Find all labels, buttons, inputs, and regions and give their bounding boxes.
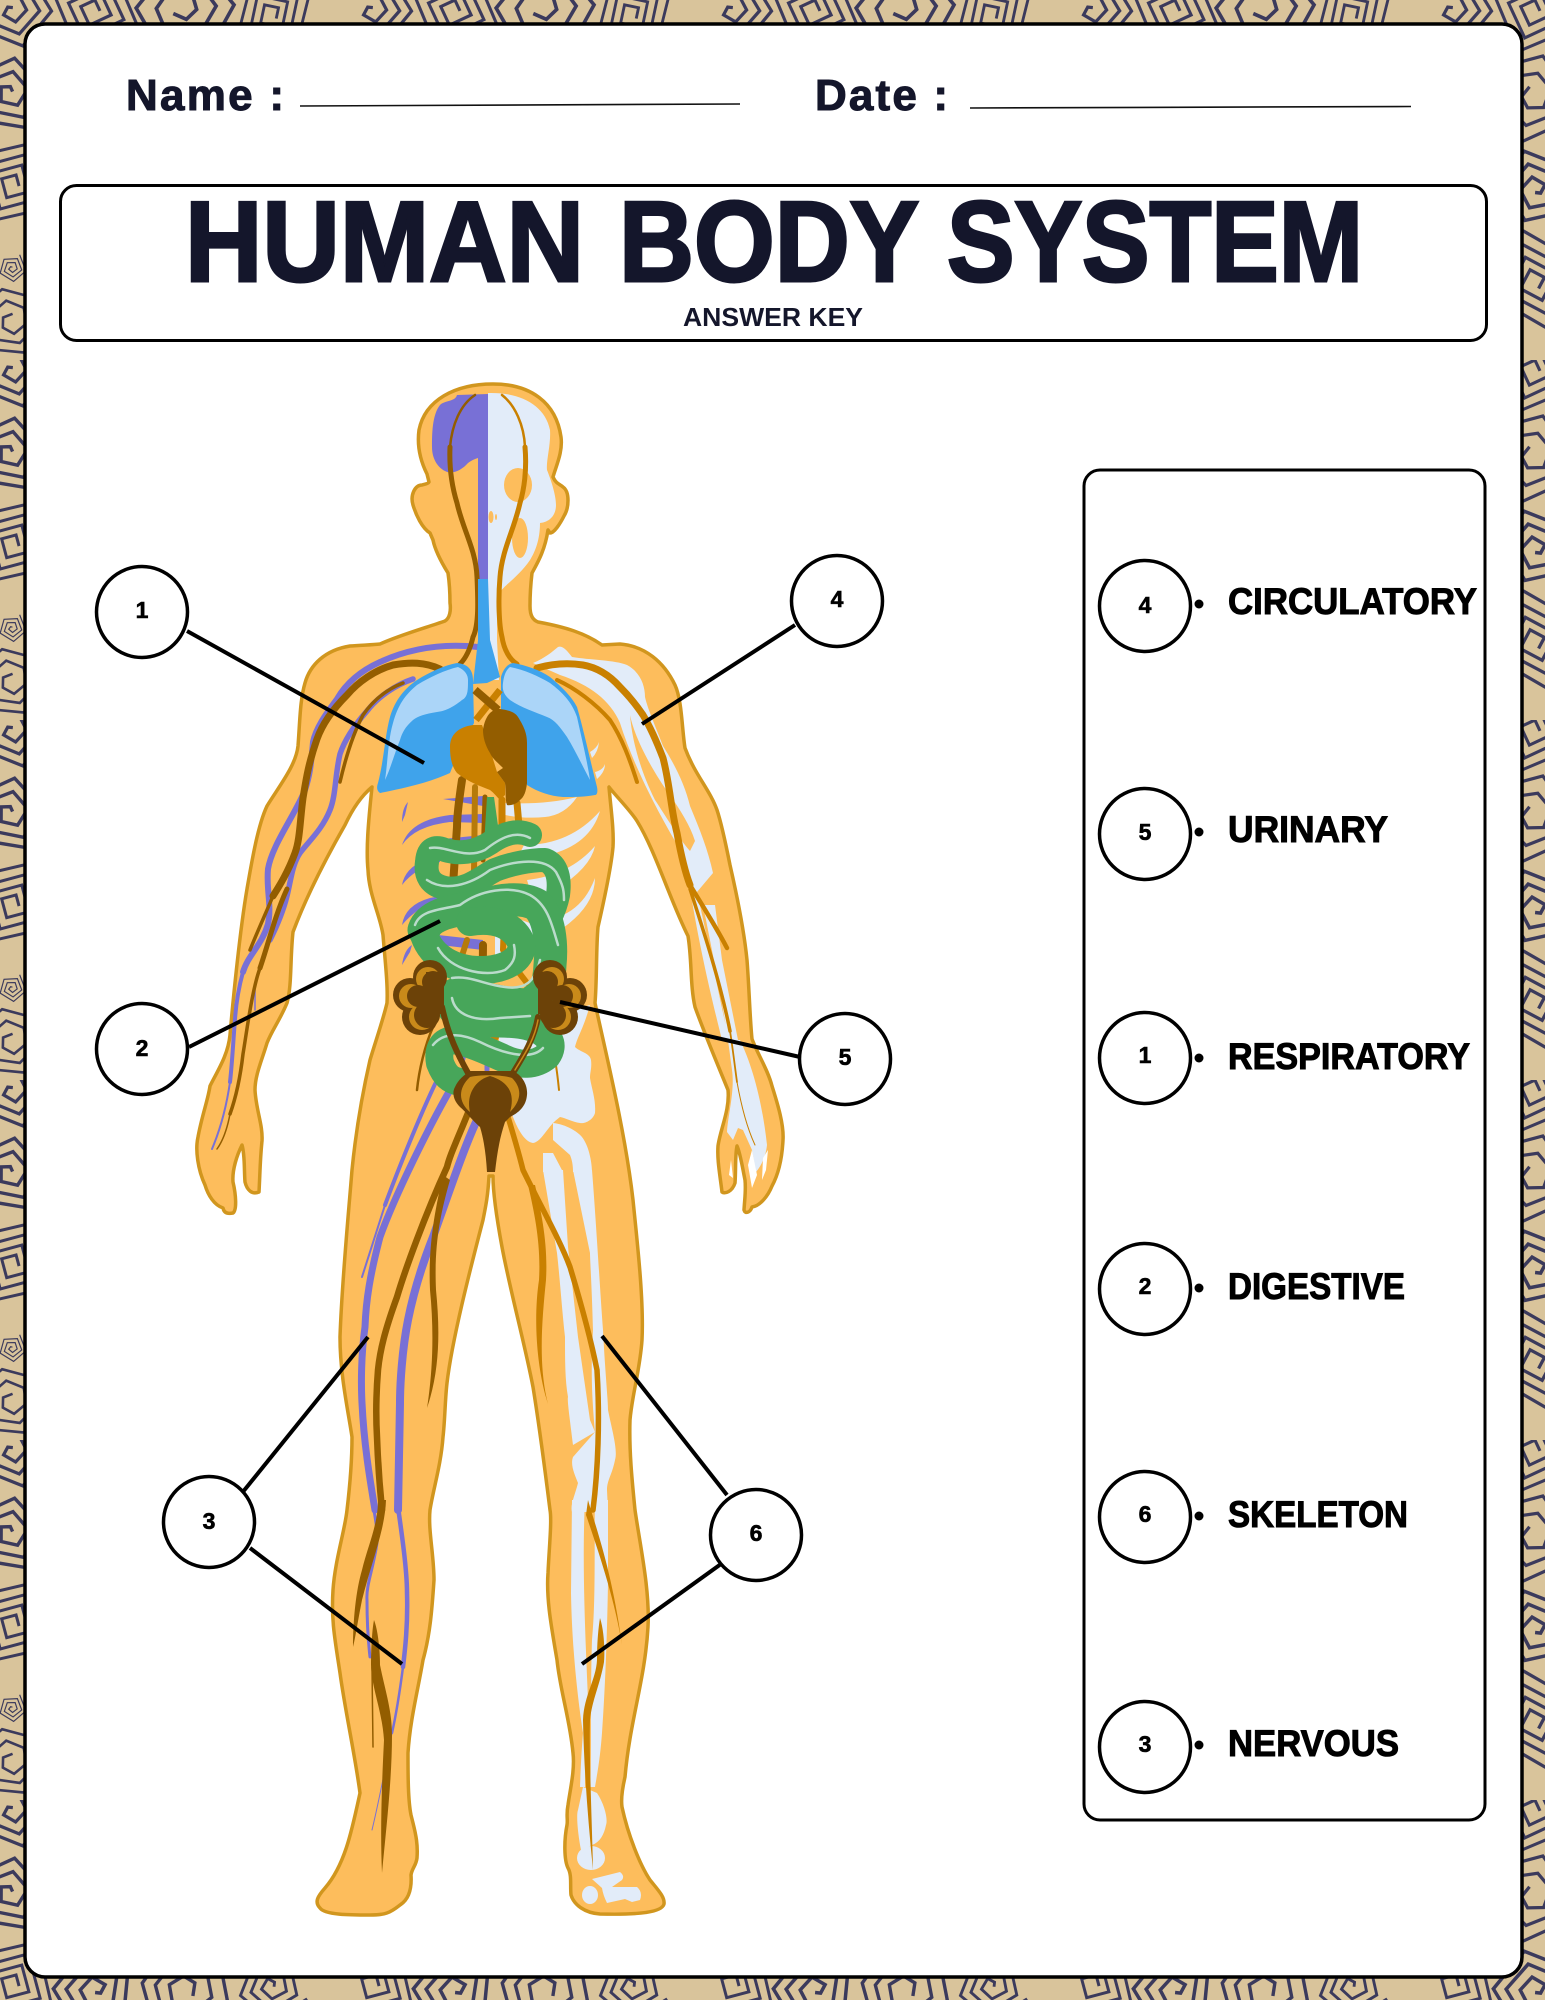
digestive system [415, 797, 564, 1082]
ribs [495, 742, 605, 960]
answer row circulatory: CIRCULATORY [1228, 581, 1477, 622]
left arm vessels [273, 663, 440, 896]
nervous system purple nerves [212, 394, 488, 1830]
title [185, 179, 1363, 306]
answer panel [1084, 470, 1485, 1820]
lower intestine bands [439, 992, 551, 1082]
heart [450, 690, 527, 805]
left calf tapered vessel [353, 1500, 386, 1647]
right shin vessel [583, 1618, 604, 1870]
answer row skeleton [1100, 1472, 1408, 1562]
esophagus [484, 797, 500, 845]
bladder [453, 1071, 527, 1172]
title box [60, 179, 1486, 340]
right lung [501, 663, 597, 797]
date label: Date : [815, 71, 948, 120]
heart dark chamber [483, 709, 527, 805]
callout 3 [164, 1476, 254, 1568]
respiratory system [377, 579, 597, 797]
stomach and upper intestine [427, 832, 559, 918]
answer row respiratory: 1 [1139, 1042, 1152, 1068]
right kidney [533, 960, 587, 1035]
title: HUMAN [185, 179, 584, 306]
callout 6 [710, 1490, 802, 1580]
right lung highlight [503, 667, 590, 780]
bladder inner ring [461, 1075, 519, 1112]
leader lines [187, 625, 800, 1664]
name label: Name : [126, 71, 284, 120]
urinary system [393, 960, 587, 1172]
left shin vessel [371, 1620, 392, 1873]
lower leg bones [571, 1500, 608, 1787]
answer row skeleton: SKELETON [1228, 1494, 1408, 1535]
answer row skeleton: 6 [1139, 1501, 1151, 1527]
callout numbers [136, 586, 852, 1546]
callout 5 [800, 1014, 890, 1104]
torso vessels [453, 780, 527, 1037]
arm nerves [243, 646, 478, 972]
intestine curl [424, 921, 522, 970]
forearm bones [690, 889, 738, 1040]
callout numbers: 3 [203, 1508, 215, 1534]
trachea [473, 579, 500, 684]
answer row respiratory: RESPIRATORY [1228, 1036, 1470, 1077]
body silhouette [197, 384, 783, 1915]
skeleton system [488, 393, 768, 1904]
name line [300, 104, 740, 106]
spine purple lower [462, 1003, 477, 1060]
arm muscle wedge [630, 715, 695, 851]
pelvis [498, 1005, 595, 1143]
heart light chamber [450, 725, 505, 800]
answer row circulatory: 4 [1139, 592, 1152, 618]
shoulder and upper arm bone [533, 647, 713, 892]
callout 1 [96, 566, 188, 658]
right thigh tapered vessel [528, 1185, 548, 1404]
leg nerves [361, 1090, 450, 1510]
right calf tapered vessel [586, 1500, 622, 1645]
answer row nervous: 3 [1139, 1731, 1151, 1757]
answer row urinary: URINARY [1228, 809, 1388, 850]
aorta [476, 690, 500, 720]
callout numbers: 1 [136, 597, 149, 623]
brain and spinal cord [432, 394, 488, 580]
right arm vessels [537, 664, 690, 885]
left kidney [393, 960, 447, 1035]
skull [488, 393, 556, 680]
torso rib nerves [402, 796, 483, 965]
hand bones [727, 1040, 767, 1172]
callout numbers: 5 [839, 1044, 852, 1070]
name and date fields [126, 71, 1411, 120]
answer row respiratory [1100, 1012, 1470, 1104]
answer row digestive: 2 [1139, 1273, 1151, 1299]
left thigh tapered vessel [427, 1175, 450, 1408]
date line [970, 106, 1411, 108]
callout numbers: 2 [136, 1035, 148, 1061]
callout numbers: 4 [831, 586, 844, 612]
circulatory vessels upper [217, 395, 755, 1149]
answer row urinary [1100, 788, 1388, 880]
callout numbers: 6 [750, 1520, 762, 1546]
left lung [377, 663, 474, 793]
subtitle: ANSWER KEY [683, 302, 863, 332]
title: BODY [619, 179, 919, 306]
ankle and foot bones [577, 1787, 641, 1903]
ureters [442, 1007, 538, 1073]
answer row digestive: DIGESTIVE [1228, 1266, 1405, 1307]
title: SYSTEM [947, 179, 1363, 306]
human body diagram [197, 384, 783, 1915]
finger highlights [729, 1150, 768, 1188]
answer row circulatory [1100, 560, 1477, 652]
middle intestine band [424, 900, 551, 1000]
callout 2 [96, 1004, 188, 1094]
intestine highlights [415, 835, 564, 1055]
answer row nervous: NERVOUS [1228, 1723, 1399, 1764]
leg and pelvic vessels [353, 1027, 622, 1873]
head vessels [450, 395, 475, 447]
femur head [543, 1123, 592, 1172]
skull openings [488, 468, 532, 558]
answer row urinary: 5 [1139, 819, 1152, 845]
left lung highlight [385, 667, 468, 780]
answer row nervous [1100, 1702, 1399, 1792]
answer row digestive [1100, 1244, 1405, 1334]
numbered circle callouts [96, 556, 890, 1580]
callout 4 [792, 556, 882, 646]
femur strips [543, 1170, 595, 1445]
